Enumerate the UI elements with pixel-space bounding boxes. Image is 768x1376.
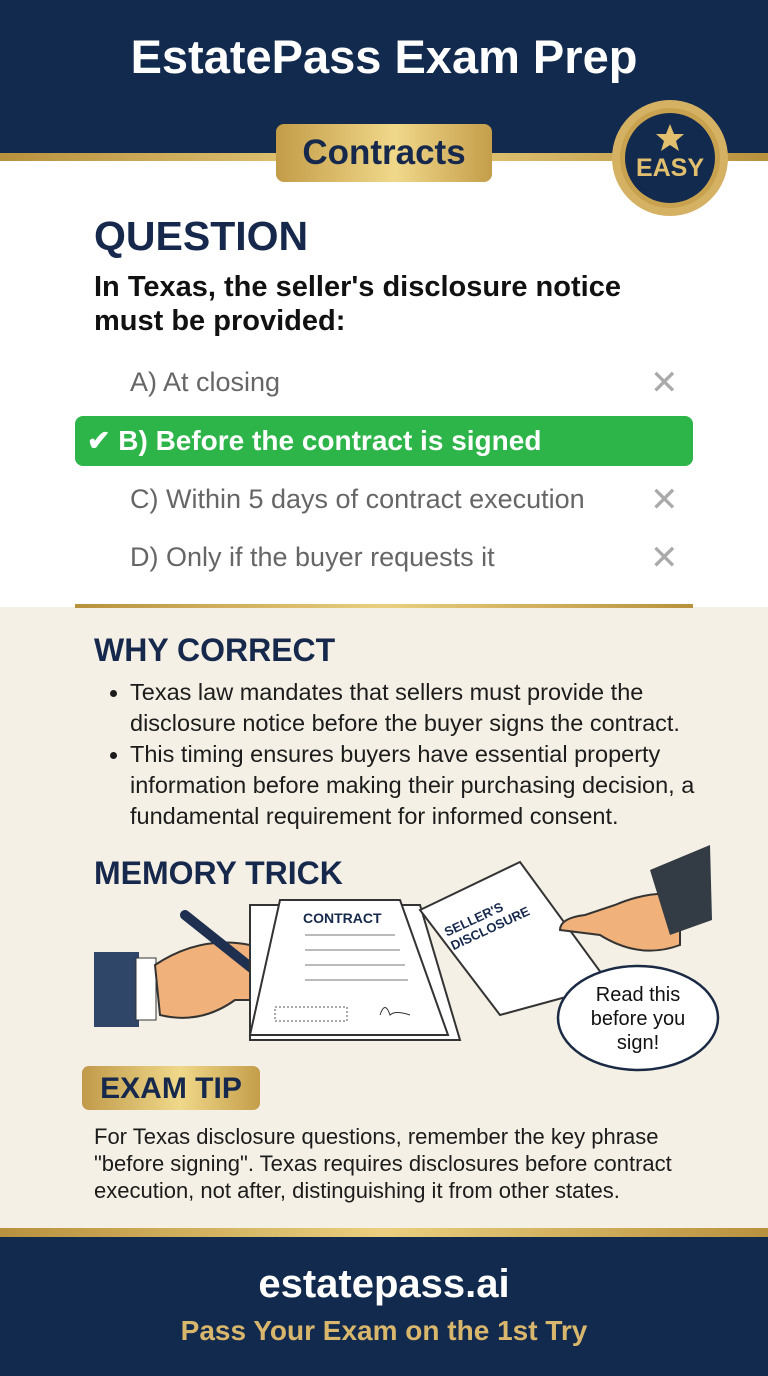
icon: x A: ✕ [650, 364, 678, 402]
memory illustration: Read this [596, 984, 680, 1006]
icon: x D: ✕ [650, 539, 678, 577]
footer gold line [0, 1228, 768, 1237]
footer tagline: Pass Your Exam on the 1st Try [181, 1315, 587, 1346]
why correct bullets: This timing ensures buyers have essential property [130, 741, 660, 767]
memory illustration [94, 845, 720, 1072]
question text: must be provided: [94, 305, 345, 337]
title: EstatePass Exam Prep [131, 30, 637, 83]
footer band [0, 1237, 768, 1376]
footer url: estatepass.ai [258, 1262, 510, 1306]
exam tip badge: EXAM TIP [100, 1072, 242, 1105]
memory illustration: sign! [617, 1032, 659, 1054]
why correct bullets: disclosure notice before the buyer signs the contract. [130, 710, 680, 736]
category badge [276, 124, 492, 182]
beige panel [0, 607, 768, 1229]
option B correct [75, 416, 693, 466]
why correct bullets: Texas law mandates that sellers must provide the [130, 679, 643, 705]
why correct heading: WHY CORRECT [94, 632, 335, 668]
difficulty seal [612, 100, 728, 216]
option A: A) At closing [130, 367, 280, 397]
option D: D) Only if the buyer requests it [130, 542, 495, 572]
exam tip text: "before signing". Texas requires disclosures before contract [94, 1151, 672, 1176]
category badge: Contracts [302, 133, 466, 172]
exam tip badge [82, 1066, 260, 1110]
memory illustration: before you [591, 1008, 685, 1030]
question heading: QUESTION [94, 213, 308, 259]
question text [94, 271, 621, 337]
question text: In Texas, the seller's disclosure notice [94, 271, 621, 303]
exam tip text: execution, not after, distinguishing it from other states. [94, 1178, 620, 1203]
difficulty seal: EASY [636, 154, 704, 182]
exam tip text [94, 1124, 672, 1203]
option C: C) Within 5 days of contract execution [130, 484, 585, 514]
exam tip text: For Texas disclosure questions, remember the key phrase [94, 1124, 659, 1149]
memory illustration: DISCLOSURE [448, 903, 532, 953]
memory illustration: SELLER'S [442, 899, 506, 939]
icon: x C: ✕ [650, 481, 678, 519]
memory trick heading: MEMORY TRICK [94, 855, 343, 891]
why correct bullets [110, 679, 694, 829]
why correct bullets: information before making their purchasing decision, a [130, 772, 694, 798]
header band [0, 0, 768, 155]
header gold line [0, 153, 768, 161]
memory illustration: CONTRACT [303, 910, 382, 926]
why correct bullets: fundamental requirement for informed consent. [130, 803, 619, 829]
option B correct: ✔ B) Before the contract is signed [87, 425, 541, 456]
